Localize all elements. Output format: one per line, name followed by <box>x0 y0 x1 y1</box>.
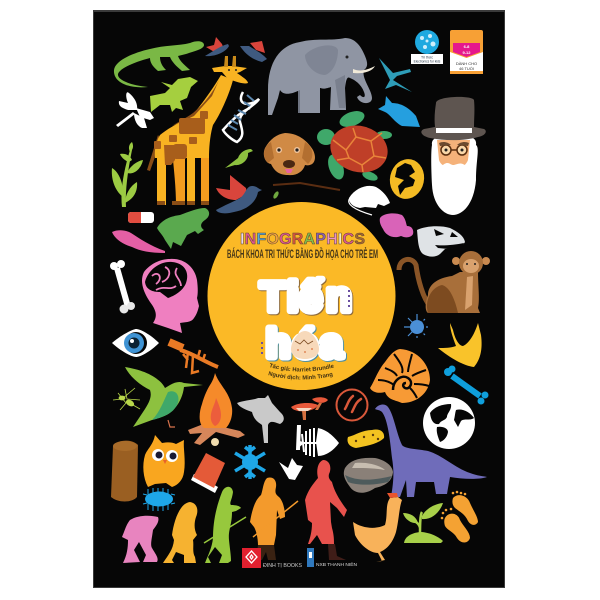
icon: dragonfly <box>116 92 154 128</box>
icon: globe <box>423 397 475 449</box>
icon: pink ape figure <box>122 516 158 563</box>
icon: blue bone <box>444 366 488 404</box>
icon: orange t-rex skeleton <box>169 342 218 373</box>
icon: dinosaur skull <box>417 226 465 257</box>
icon: small red bird left <box>205 37 229 56</box>
icon: brown branch <box>272 183 340 199</box>
icon: small green bird <box>225 149 253 168</box>
icon: dog head <box>264 133 315 175</box>
age badge: DÀNH CHO <box>456 61 477 66</box>
publisher: NXB Thanh Nien <box>307 548 358 568</box>
publisher: Dinh Ti Books: ĐINH TỊ BOOKS <box>263 563 302 569</box>
icon: green plant <box>112 142 143 207</box>
icon: red book <box>191 453 225 493</box>
icon: monkey <box>399 251 490 313</box>
icon: blue virus <box>404 314 430 340</box>
icon: chicken <box>353 493 402 562</box>
icon: hummingbird <box>125 367 203 427</box>
icon: purple brontosaurus <box>375 405 487 497</box>
icon: eye <box>112 329 159 357</box>
icon: white mouse <box>349 186 390 215</box>
icon: blue pterosaur <box>379 58 412 92</box>
icon: seal badge: Tri thức <box>421 56 433 60</box>
icon: ammonite <box>370 349 430 403</box>
icon: cracked egg <box>291 331 319 359</box>
title: INFOGRAPHICS: INFOGRAPHICS <box>240 231 365 248</box>
icon: circled stripes <box>336 390 368 420</box>
book cover <box>93 10 505 588</box>
icon: seal badge <box>411 30 443 64</box>
icon: pink head with brain <box>142 259 199 333</box>
icon: white bone <box>110 260 135 314</box>
icon: yellow oval fossil <box>386 156 428 202</box>
icon: green frog <box>157 208 209 249</box>
publisher: NXB Thanh Nien: NXB THANH NIÊN <box>316 560 358 568</box>
publisher: Dinh Ti Books <box>242 548 302 569</box>
title: Tiến: Tiến <box>260 273 352 320</box>
icon: yellow ape figure <box>163 502 197 563</box>
icon: green sprout <box>403 503 443 543</box>
icon: seal badge: Electronics for kids <box>414 60 441 64</box>
icon: ant <box>113 388 140 410</box>
icon: blue snowflake <box>235 445 265 479</box>
icon: orange human with spear <box>250 477 298 560</box>
author text: Tác giả: Harriet Brundle <box>270 363 334 372</box>
icon: giraffe <box>147 56 248 205</box>
icon: green pterosaur <box>150 77 198 112</box>
author text: Người dịch: Minh Trang <box>268 371 333 380</box>
icon: owl <box>143 435 185 487</box>
icon: yellow bacterium <box>347 429 384 448</box>
age badge: 6-8 <box>464 44 470 49</box>
icon: blue fish <box>378 96 420 127</box>
icon: turtle <box>317 108 393 182</box>
age badge <box>450 30 483 74</box>
icon: mushrooms <box>291 397 328 420</box>
yellow circle: title area <box>208 202 396 390</box>
icon: elephant <box>268 38 375 115</box>
icon: red walking human <box>305 460 347 560</box>
icon: orange footprints <box>441 491 478 542</box>
icon: DNA helix <box>223 92 259 142</box>
title: hóa: hóa <box>266 322 343 366</box>
icon: Darwin portrait <box>421 97 486 215</box>
decoration: hóa dots <box>261 342 263 356</box>
icon: white fishbone <box>297 428 339 457</box>
icon: rabbit <box>237 395 284 443</box>
icon: green lizard <box>114 41 204 87</box>
age badge: 46 TUỔI <box>459 66 474 71</box>
author text <box>268 363 334 380</box>
icon: white bird footprint <box>279 425 303 480</box>
decoration: Tiến dots <box>348 290 350 310</box>
icon: rock <box>344 458 393 493</box>
icon: small red bird right <box>240 41 267 62</box>
icon: blue microbe <box>143 488 175 511</box>
icon: yellow dinosaur footprint <box>438 323 482 367</box>
icon: wooden log <box>111 441 138 502</box>
age badge: 9-12 <box>462 50 471 55</box>
icon: red and blue bird <box>216 175 262 213</box>
icon: pink fish <box>112 230 165 253</box>
icon: pink animal head <box>380 213 413 237</box>
icon: capsule pill <box>128 212 154 223</box>
icon: green early human <box>204 487 246 563</box>
subtitle: BÁCH KHOA TRI THỨC BẰNG ĐỒ HỌA CHO TRẺ EM <box>227 248 378 261</box>
icon: campfire <box>188 373 245 446</box>
